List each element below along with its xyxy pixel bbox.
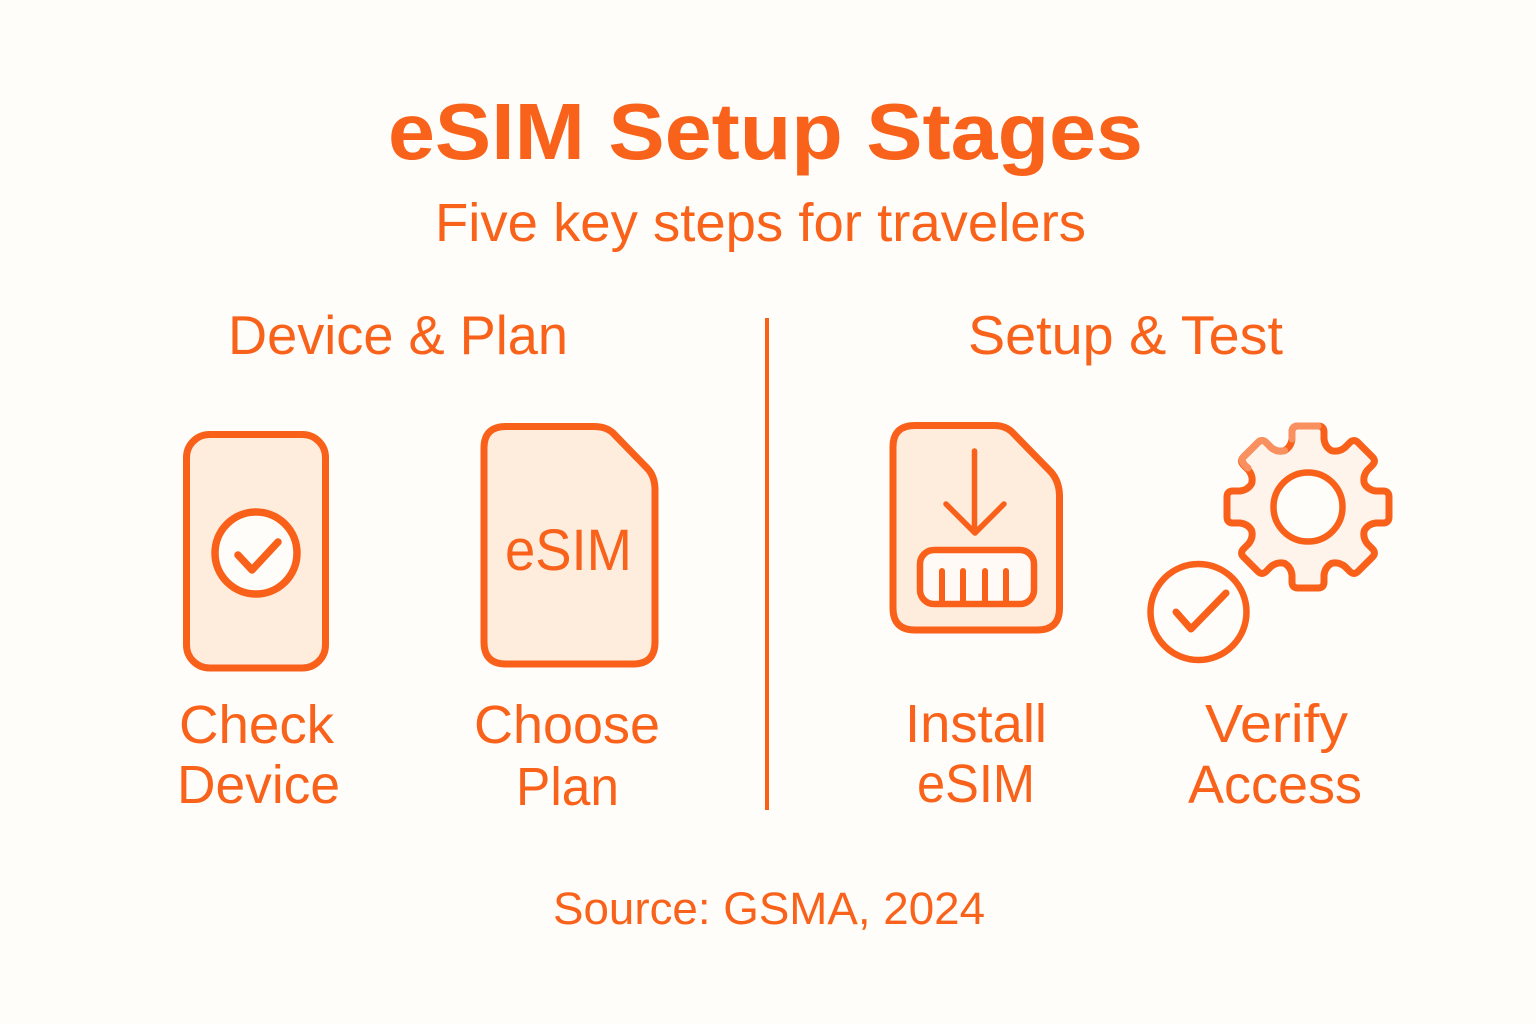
heading: Device & Plan: Device & Plan — [228, 304, 568, 366]
label: Choose Plan — [474, 695, 660, 817]
center divider — [765, 318, 769, 810]
icon: check circle — [1150, 564, 1246, 660]
source note: Source: GSMA, 2024 — [553, 883, 985, 934]
label: Choose Plan: Choose — [474, 695, 660, 755]
label: Verify Access: Access — [1188, 755, 1362, 815]
label: Check Device: Device — [177, 755, 340, 815]
icon: phone with check — [186, 434, 326, 668]
label: Choose Plan: Plan — [516, 757, 619, 817]
label: Install eSIM — [905, 694, 1047, 814]
label: Install eSIM: eSIM — [917, 754, 1035, 814]
icon: eSIM card — [484, 426, 655, 664]
icon: install eSIM card with download arrow — [893, 426, 1060, 630]
label: Verify Access: Verify — [1205, 694, 1348, 754]
eSIM card label: eSIM — [505, 518, 632, 583]
subtitle: Five key steps for travelers — [435, 193, 1086, 253]
label: Install eSIM: Install — [905, 694, 1047, 754]
icon: gear — [1227, 426, 1389, 588]
label: Check Device: Check — [179, 695, 335, 755]
label: Verify Access — [1188, 694, 1362, 815]
heading: Setup & Test: Setup & Test — [968, 304, 1283, 366]
title: eSIM Setup Stages — [388, 87, 1143, 176]
label: Check Device — [177, 695, 340, 815]
